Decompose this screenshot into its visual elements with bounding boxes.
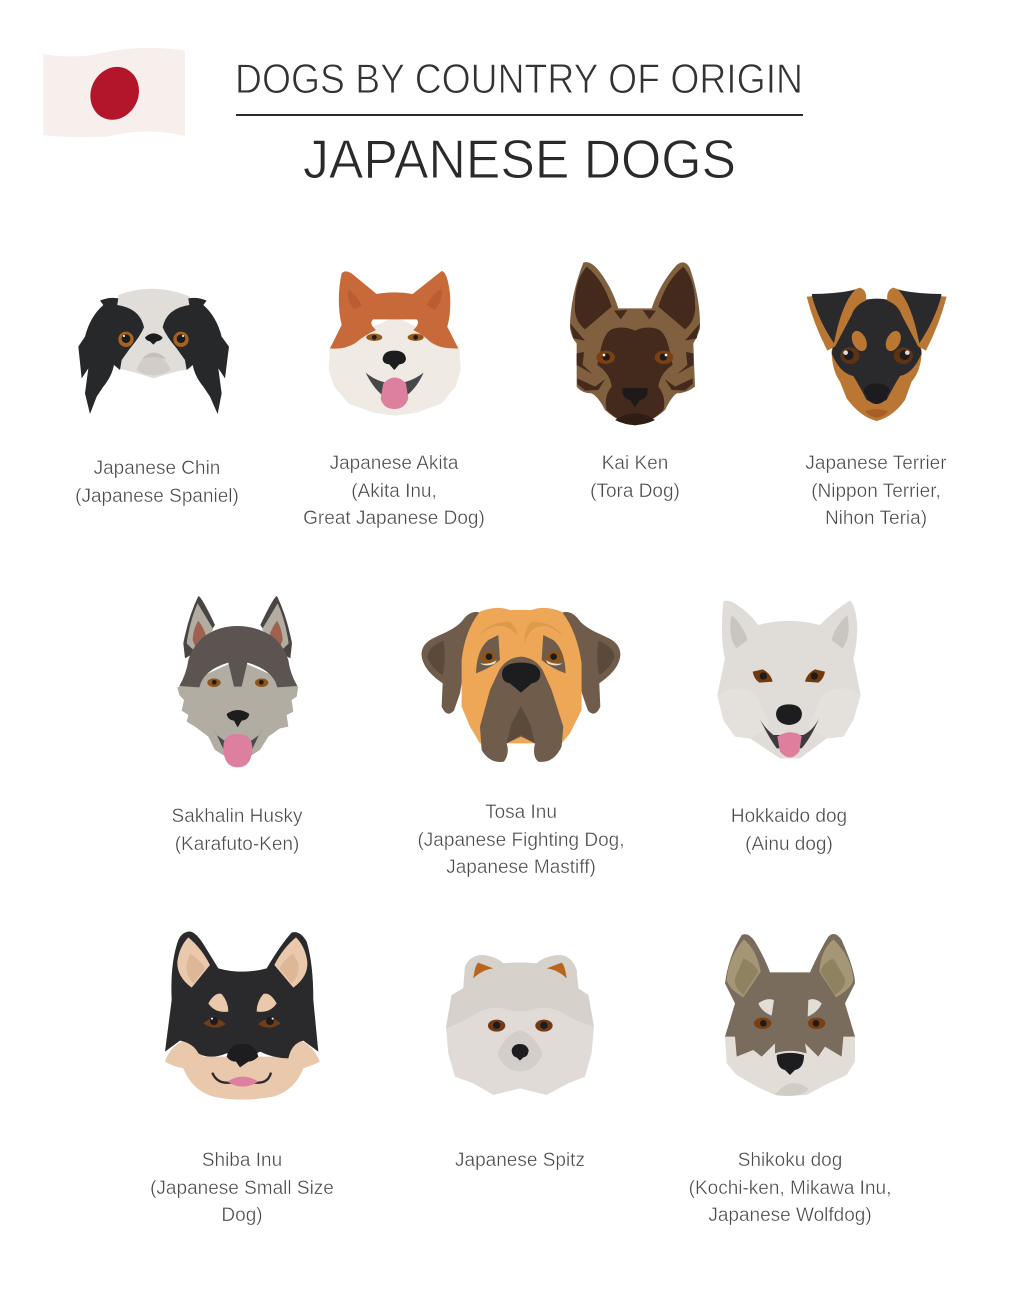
panel: Sakhalin Husky [172, 596, 303, 855]
title divider [236, 114, 803, 116]
label: Japanese Terrier: (Nippon Terrier, [811, 481, 941, 502]
label: Kai Ken: (Tora Dog) [590, 481, 680, 502]
label: Japanese Chin: (Japanese Spaniel) [75, 486, 239, 507]
label: Tosa Inu: (Japanese Fighting Dog, [417, 830, 625, 851]
icon: Shikoku dog face [725, 934, 855, 1096]
label: Hokkaido dog: (Ainu dog) [745, 834, 833, 855]
panel: Tosa Inu [417, 608, 625, 878]
label: Shikoku dog: Japanese Wolfdog) [708, 1205, 872, 1226]
icon: Sakhalin Husky face [177, 596, 298, 767]
icon: Shiba Inu face [165, 932, 320, 1100]
label: Japanese Spitz: Japanese Spitz [455, 1150, 585, 1171]
panel: Japanese Akita [303, 271, 485, 529]
label: Shiba Inu: Shiba Inu [202, 1150, 282, 1171]
label: Tosa Inu: Tosa Inu [485, 802, 557, 823]
icon: Japanese Spitz face [446, 955, 594, 1095]
icon: Tosa Inu face [422, 608, 620, 762]
label: Sakhalin Husky: (Karafuto-Ken) [175, 834, 299, 855]
panel: Hokkaido dog [717, 601, 861, 855]
title: dogs by country of origin: DOGS BY COUNTRY OF ORIGIN [235, 55, 803, 102]
icon: Hokkaido dog face [717, 601, 861, 758]
label: Hokkaido dog: Hokkaido dog [731, 806, 847, 827]
icon: Japanese Akita face [329, 271, 461, 416]
heading: Japanese dogs: JAPANESE DOGS [303, 128, 736, 190]
label: Japanese Akita: Great Japanese Dog) [303, 508, 485, 529]
icon: Japanese flag [43, 48, 185, 137]
panel: Japanese Chin [75, 289, 239, 507]
icon: Kai Ken face [570, 262, 700, 425]
label: Sakhalin Husky: Sakhalin Husky [172, 806, 303, 827]
panel: Japanese Spitz [446, 955, 594, 1171]
panel: Shiba Inu [150, 932, 334, 1226]
label: Shikoku dog: (Kochi-ken, Mikawa Inu, [689, 1178, 891, 1199]
label: Japanese Terrier: Japanese Terrier [805, 453, 947, 474]
icon: Japanese Terrier face [807, 288, 947, 421]
icon: Japanese Chin face [78, 289, 229, 414]
label: Shiba Inu: (Japanese Small Size [150, 1178, 334, 1199]
label: Japanese Chin: Japanese Chin [94, 458, 220, 479]
label: Tosa Inu: Japanese Mastiff) [446, 857, 596, 878]
label: Japanese Akita: Japanese Akita [330, 453, 459, 474]
label: Shiba Inu: Dog) [221, 1205, 263, 1226]
panel: Japanese Terrier [805, 288, 947, 529]
panel: Shikoku dog [689, 934, 891, 1226]
label: Shikoku dog: Shikoku dog [738, 1150, 842, 1171]
label: Japanese Terrier: Nihon Teria) [825, 508, 927, 529]
label: Japanese Akita: (Akita Inu, [351, 481, 437, 502]
panel: Kai Ken [570, 262, 700, 502]
label: Kai Ken: Kai Ken [602, 453, 668, 474]
